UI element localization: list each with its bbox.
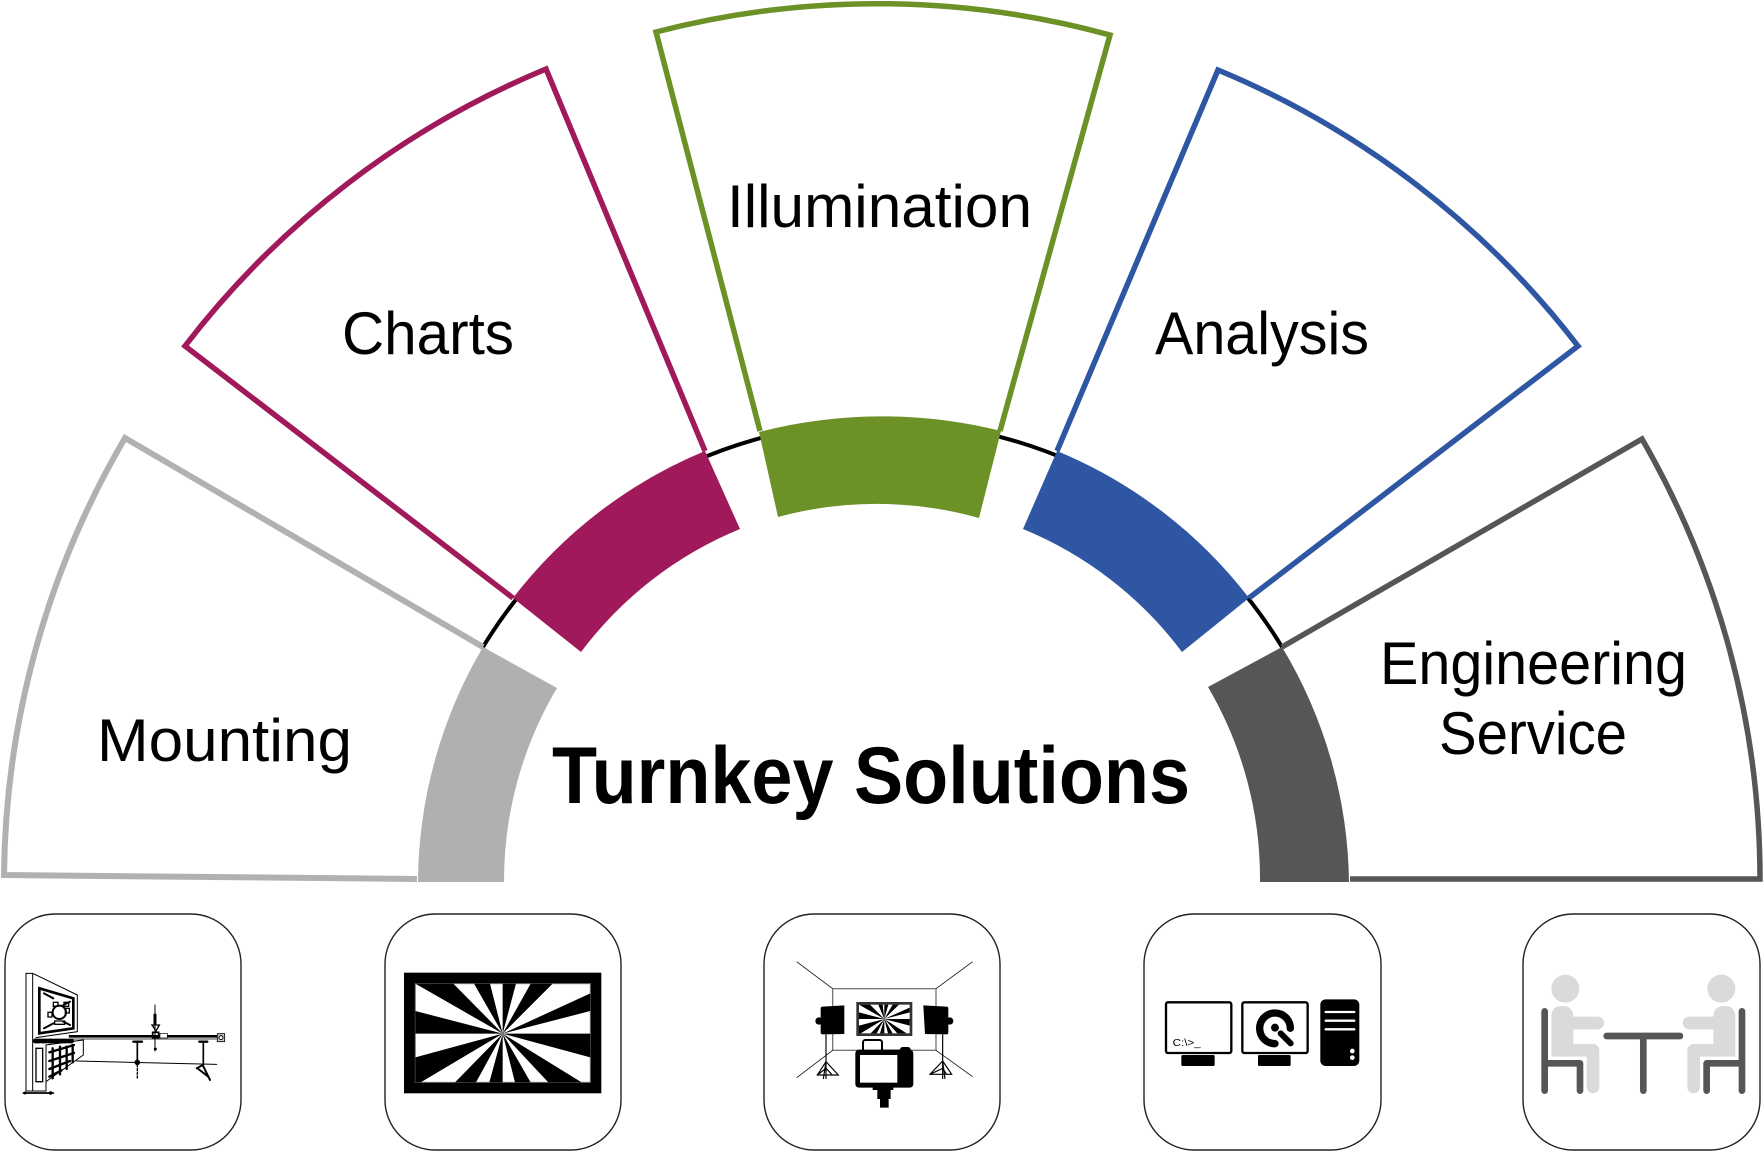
- icon: mounting rail and chart wall: [23, 973, 225, 1095]
- icon: monitors and computer tower: [1166, 999, 1359, 1066]
- arc band: Charts: [513, 451, 740, 652]
- icon: monitors and computer tower: C:\>_: [1173, 1038, 1201, 1049]
- arc band: Illumination: [759, 416, 1001, 518]
- card: engineering service icon: [1523, 914, 1760, 1150]
- card: mounting icon: [5, 914, 241, 1150]
- label: Illumination: Illumination: [727, 173, 1032, 240]
- panel: Charts: [185, 69, 740, 652]
- arc band: Mounting: [418, 647, 557, 882]
- icon: two people meeting at a table: [1545, 975, 1742, 1091]
- title: Turnkey Solutions: [552, 731, 1190, 821]
- icon: light booth with lamps and camera: [797, 962, 973, 1108]
- label: Analysis: Analysis: [1155, 300, 1369, 367]
- label: Charts: Charts: [342, 300, 514, 367]
- card: charts icon: [385, 914, 621, 1150]
- arc band: Engineering Service: [1208, 647, 1349, 882]
- connecting thin arc: [483, 422, 1282, 647]
- panel: Illumination: [656, 4, 1110, 518]
- panel: Engineering Service: [1208, 439, 1760, 882]
- icon: starburst test chart: [404, 973, 601, 1093]
- panel: Analysis: [1023, 70, 1578, 652]
- card: illumination icon: [764, 914, 1000, 1150]
- label: Engineering Service: Engineering: [1380, 630, 1687, 697]
- label: Engineering Service: Service: [1439, 700, 1627, 767]
- card: analysis icon: [1144, 914, 1381, 1150]
- panel: Mounting: [4, 438, 557, 882]
- arc band: Analysis: [1023, 451, 1249, 652]
- label: Mounting: Mounting: [97, 707, 352, 774]
